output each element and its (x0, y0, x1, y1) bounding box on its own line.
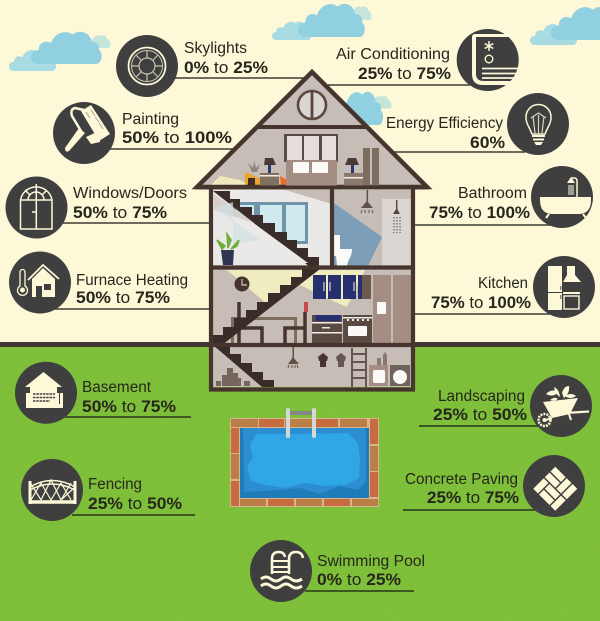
icon: pool ladder and waves (250, 540, 312, 602)
house (196, 72, 428, 390)
lawn background (0, 345, 600, 621)
wardrobe (363, 148, 379, 187)
value: 25% to 50% (88, 494, 182, 513)
value: 0% to 25% (184, 58, 268, 77)
upper floor left room (213, 190, 332, 267)
washer (369, 352, 388, 386)
icon: paint roller (53, 102, 115, 164)
label: Kitchen (478, 275, 528, 292)
label: Concrete Paving (405, 471, 518, 488)
icon: bathtub (531, 166, 593, 228)
item: energy efficiency (386, 93, 569, 155)
label: Furnace Heating (76, 272, 188, 289)
dining table and chairs (231, 302, 308, 344)
house frame (211, 188, 413, 390)
cabinets (313, 275, 371, 299)
ground line (0, 342, 600, 347)
water (240, 428, 369, 498)
clock (234, 276, 250, 292)
label: Energy Efficiency (386, 115, 503, 132)
item: air conditioning (336, 29, 519, 91)
value: 60% (470, 133, 505, 152)
icon: light bulb (507, 93, 569, 155)
ceiling lamp (361, 190, 373, 213)
value: 50% to 75% (73, 203, 167, 222)
value: 25% to 75% (358, 64, 451, 83)
potted plant (217, 234, 239, 265)
value: 50% to 75% (82, 397, 176, 416)
ceiling lamp (288, 347, 299, 368)
icon: paving bricks (523, 455, 585, 517)
lamps and nightstands (260, 158, 363, 187)
icon: house with basement (15, 362, 77, 424)
pool bricks (231, 419, 378, 506)
dryer (390, 365, 410, 386)
lawn texture (0, 347, 600, 621)
value: 50% to 100% (122, 128, 232, 147)
basement floor (213, 345, 411, 387)
label: Windows/Doors (73, 185, 187, 202)
item: landscaping (433, 375, 592, 437)
label: Basement (82, 379, 152, 396)
skylight window (298, 91, 326, 119)
value: 25% to 75% (427, 488, 519, 507)
item: painting (53, 102, 232, 164)
shower head (393, 200, 400, 233)
label: Swimming Pool (317, 553, 425, 570)
icon: air conditioner unit (457, 29, 519, 91)
leader lines (55, 78, 550, 591)
label: Skylights (184, 40, 247, 57)
toilet (334, 235, 352, 266)
label: Fencing (88, 476, 142, 493)
roof and attic (196, 72, 428, 190)
staircase upper (213, 191, 319, 267)
icon: house and thermometer (9, 252, 71, 314)
icon: skylight (116, 35, 178, 97)
label: Air Conditioning (336, 46, 450, 63)
item: basement (15, 362, 176, 424)
cloud: top centre (272, 4, 372, 40)
value: 75% to 100% (431, 293, 531, 312)
item: bathroom (429, 166, 593, 228)
bathroom (334, 190, 413, 267)
pool ladder (286, 408, 316, 438)
item: furnace heating (9, 252, 188, 314)
fridge (373, 275, 411, 343)
item: kitchen (431, 256, 595, 318)
item: swimming pool (250, 540, 425, 602)
swimming pool (230, 408, 379, 507)
item: concrete paving (405, 455, 585, 517)
light beam (227, 270, 365, 307)
stove (343, 315, 372, 343)
cloud: top right (530, 7, 600, 45)
bedroom window (284, 134, 338, 162)
plant (248, 161, 260, 187)
ladder (352, 348, 366, 387)
icon: arched door (6, 176, 68, 238)
item: windows and doors (6, 176, 187, 238)
basement stairs (213, 345, 274, 387)
label: Bathroom (458, 185, 527, 202)
cloud: behind roof (332, 92, 392, 125)
value: 25% to 50% (433, 405, 527, 424)
item: skylights (116, 35, 268, 97)
icon: wheelbarrow (530, 375, 592, 437)
label: Painting (122, 111, 179, 128)
value: 75% to 100% (429, 203, 530, 222)
attic light patches (210, 176, 252, 186)
kitchen and dining floor (213, 269, 412, 345)
item: fencing (21, 459, 182, 521)
icon: fence (21, 459, 83, 521)
sky background (0, 0, 600, 345)
staircase lower (213, 269, 320, 345)
landing window (233, 202, 308, 244)
value: 50% to 75% (76, 288, 170, 307)
counter (312, 315, 342, 343)
icon: fridge and stove (533, 256, 595, 318)
value: 0% to 25% (317, 570, 401, 589)
label: Landscaping (438, 388, 525, 405)
hanging clothes (318, 353, 346, 367)
cloud: upper left (9, 32, 111, 71)
storage boxes (216, 368, 250, 386)
bed (286, 160, 337, 187)
